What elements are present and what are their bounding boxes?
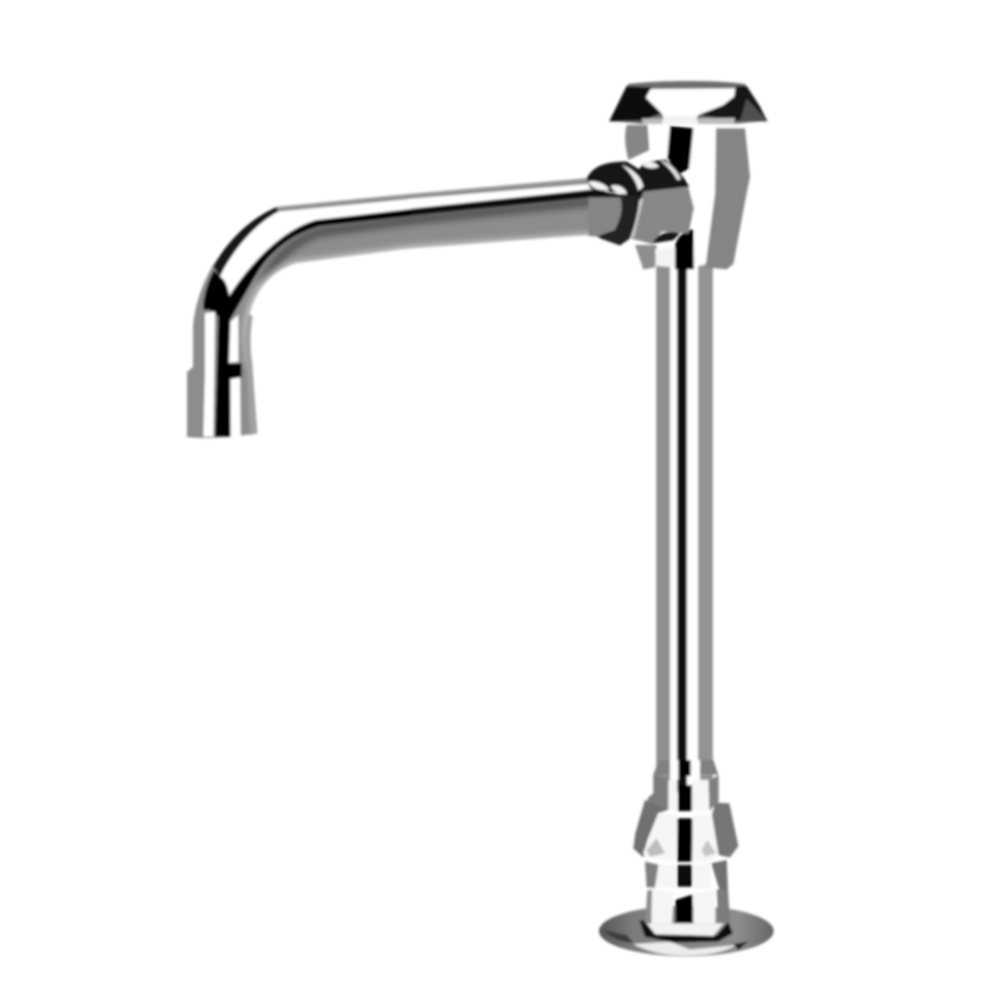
cap silhouette <box>609 81 767 124</box>
body: white facet <box>650 128 670 158</box>
base flange <box>599 906 774 956</box>
black reflection <box>203 209 411 437</box>
body: lower gray <box>635 245 657 269</box>
elbow outer shadow <box>213 207 278 277</box>
body: main highlight <box>688 128 717 267</box>
body: lower black <box>675 229 694 269</box>
collar gray hex <box>631 187 694 244</box>
left nozzle highlight <box>203 312 215 437</box>
pipe shading strips <box>248 200 605 365</box>
collar highlights <box>588 181 609 190</box>
spout: curved pipe <box>187 179 605 438</box>
body: black facet <box>667 126 694 175</box>
neck collar <box>645 760 719 811</box>
body: left gray facet <box>625 125 649 160</box>
hex nut <box>633 800 738 862</box>
cap right dark <box>698 86 767 121</box>
flange dark ring <box>639 921 733 943</box>
pipe top edge <box>277 179 590 208</box>
nozzle lip <box>245 313 257 435</box>
cap rim <box>642 118 735 124</box>
body: lower white <box>655 247 676 267</box>
right nozzle highlight <box>229 315 241 437</box>
valve body and collar <box>587 125 750 269</box>
lower nut <box>645 860 730 923</box>
handle cap <box>609 81 767 124</box>
bottom band <box>647 923 723 936</box>
base fittings <box>599 760 774 956</box>
cap highlight <box>646 88 735 117</box>
elbow highlight <box>220 199 411 295</box>
faucet illustration <box>185 79 776 958</box>
flange front highlights <box>633 942 737 956</box>
collar ring dark lower <box>600 195 642 245</box>
pipe silhouette <box>187 179 605 438</box>
pipe black reflection <box>408 188 605 216</box>
vertical stem <box>655 262 714 792</box>
body: right gray facet <box>705 128 750 269</box>
cap left dark <box>609 86 662 121</box>
pipe highlight <box>408 184 605 209</box>
collar dark ring <box>587 159 690 245</box>
pipe end into collar <box>588 190 623 237</box>
